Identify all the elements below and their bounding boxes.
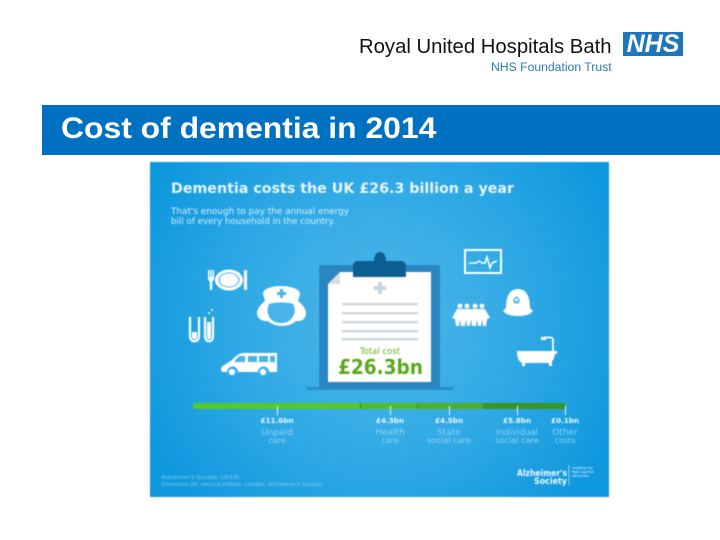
icon: test tubes bbox=[190, 309, 213, 341]
label: state social care: social care bbox=[427, 435, 471, 445]
label: health care: £4.3bn bbox=[376, 416, 404, 425]
total cost label: Total cost bbox=[359, 347, 401, 357]
icon: plate and cutlery bbox=[208, 270, 247, 290]
title: Cost of dementia in 2014 bbox=[61, 112, 436, 145]
label: health care: care bbox=[381, 436, 399, 445]
tick marks bbox=[277, 406, 566, 415]
panel subheading: That's enough to pay the annual energy bbox=[170, 206, 349, 216]
label: state social care: State bbox=[437, 428, 461, 438]
title band bbox=[42, 105, 720, 155]
label: health care bbox=[375, 416, 405, 445]
stacked cost bar bbox=[193, 403, 566, 415]
label: unpaid care bbox=[260, 416, 294, 445]
icon: heart monitor bbox=[465, 250, 501, 273]
logo: Alzheimer's Society: Society bbox=[534, 477, 567, 487]
clipboard bbox=[307, 252, 453, 390]
label: other costs: £0.1bn bbox=[551, 416, 579, 425]
label: individual social care: £5.8bn bbox=[503, 416, 531, 425]
logo: Royal United Hospitals Bath NHS bbox=[359, 30, 683, 74]
clipboard board bbox=[319, 265, 440, 388]
panel subheading: bill of every household in the country. bbox=[171, 216, 335, 226]
source citation: Alzheimer's Society (2014) bbox=[161, 475, 239, 481]
label: health care: Health bbox=[375, 428, 405, 438]
icon: nurse bbox=[257, 286, 306, 326]
logo: Alzheimer's Society: Leading the bbox=[572, 466, 593, 470]
icon: group of people bbox=[452, 304, 490, 326]
label: unpaid care: Unpaid bbox=[261, 428, 293, 438]
label: unpaid care: £11.6bn bbox=[260, 416, 294, 425]
icon: bathtub bbox=[517, 337, 557, 366]
label: other costs: costs bbox=[555, 436, 575, 445]
cost labels bbox=[260, 416, 579, 445]
logo: NHS lozenge: NHS bbox=[627, 30, 679, 58]
logo: Alzheimer's Society: dementia bbox=[572, 474, 589, 478]
logo text: foundation trust: NHS Foundation Trust bbox=[491, 60, 612, 74]
label: individual social care: social care bbox=[495, 435, 539, 445]
total cost value: £26.3bn bbox=[338, 355, 423, 379]
label: other costs bbox=[551, 416, 579, 445]
label: state social care: £4.5bn bbox=[435, 416, 463, 425]
clipboard shadow bbox=[307, 387, 453, 390]
logo: Alzheimer's Society: fight against bbox=[572, 470, 595, 474]
panel background bbox=[150, 162, 609, 497]
logo text: trust name: Royal United Hospitals Bath bbox=[359, 36, 612, 58]
plus mark bbox=[374, 282, 386, 294]
panel heading: Dementia costs the UK £26.3 billion a year bbox=[171, 181, 514, 197]
label: unpaid care: care bbox=[268, 436, 286, 445]
logo: Alzheimer's Society: Alzheimer's bbox=[517, 469, 567, 479]
label: individual social care bbox=[495, 416, 539, 445]
icon: police helmet bbox=[503, 289, 533, 316]
clipboard paper bbox=[328, 272, 431, 382]
label: individual social care: Individual bbox=[496, 428, 538, 438]
panel subheading bbox=[170, 206, 349, 226]
source citation bbox=[161, 475, 323, 488]
logo: Alzheimer's Society bbox=[517, 465, 595, 487]
source citation: Dementia UK: second edition. London: Alzheimer's Society. bbox=[161, 482, 323, 488]
label: other costs: Other bbox=[552, 428, 578, 438]
list lines bbox=[342, 303, 418, 340]
clipboard clip bbox=[353, 252, 406, 277]
label: state social care bbox=[427, 416, 471, 445]
icon: minibus bbox=[221, 353, 277, 376]
